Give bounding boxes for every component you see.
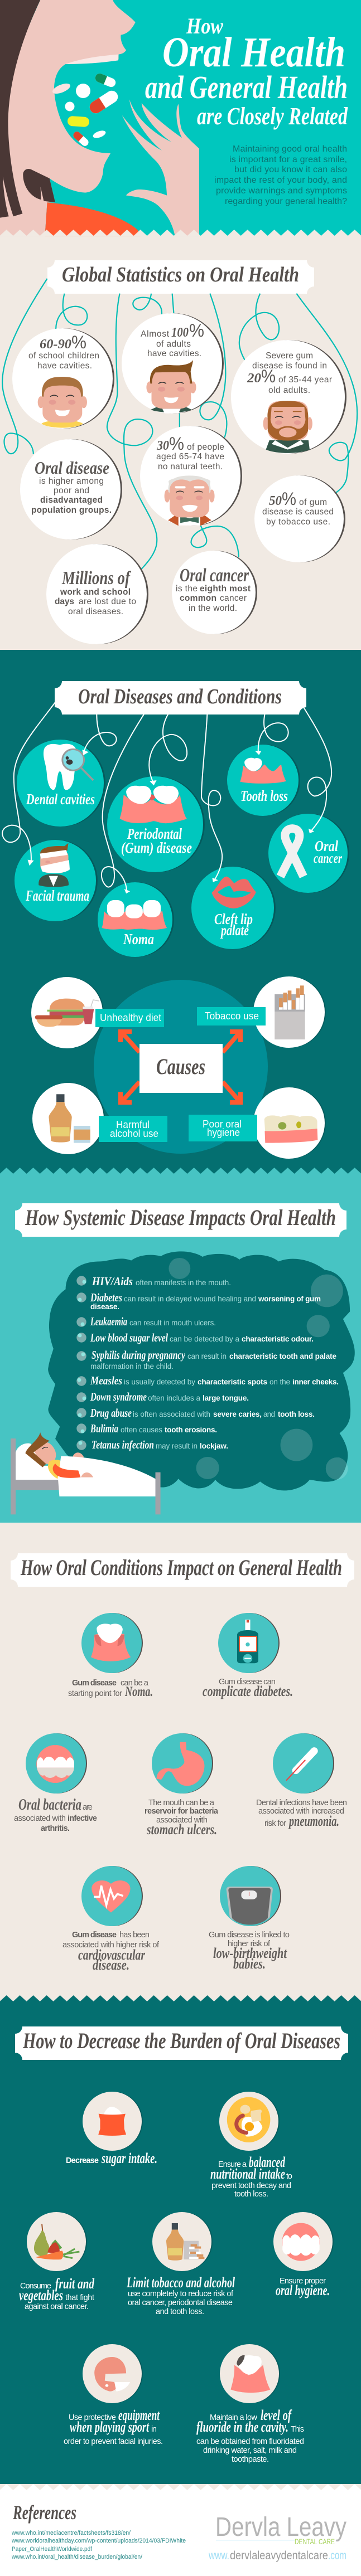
stat bubble: 60-90%: of school children: [28, 351, 99, 361]
stat bubble: almost 100%: Almost: [141, 329, 170, 339]
icon: gum and tooth: [91, 1624, 131, 1661]
stat bubble: 60-90%: 60-90: [40, 337, 71, 352]
banner: oral diseases and conditions: Oral Diseases and Conditions: [78, 685, 282, 708]
zigzag divider: [0, 1168, 361, 1174]
references: Paper_OralHealthWorldwide.pdf: [12, 2546, 93, 2553]
intro paragraph: but did you know it can also: [234, 165, 347, 174]
list: systemic diseases: lockjaw.: [200, 1442, 228, 1450]
impact text: cardiovascular: Gum disease: [72, 1931, 117, 1940]
disease labels: Cleft lip: [214, 911, 253, 927]
cause label: poor oral hygiene: Poor oral: [203, 1119, 242, 1130]
prevention text: nutrition: tooth loss.: [234, 2190, 268, 2199]
discs: prevention icons: [27, 2092, 334, 2403]
list: systemic diseases: characteristic spots: [198, 1378, 267, 1386]
references: www.who.int/mediacentre/factsheets/fs318/en/: [11, 2530, 131, 2536]
list: systemic diseases: may result in: [156, 1442, 198, 1450]
stat bubble: oral disease: [20, 439, 122, 539]
impact text: cardiovascular: [62, 1931, 160, 1973]
impact text: low birthweight: babies.: [233, 1956, 266, 1972]
disease labels: Periodontal: [127, 825, 182, 842]
impact text: arthritis: associated with: [14, 1814, 66, 1823]
causes box: [139, 1044, 223, 1093]
stat bubble: 30% no natural teeth: aged 65-74 have: [156, 452, 224, 461]
prevention text: protective equipment: equipment: [118, 2407, 160, 2423]
list: systemic diseases: often includes a: [148, 1394, 200, 1402]
disease labels: Oral: [315, 838, 338, 854]
list: systemic diseases: Down syndrome: [90, 1390, 147, 1403]
icon: adult man face: [146, 360, 196, 414]
cause label: tobacco use: [197, 1007, 266, 1025]
icons: prevention illustrations row three: [94, 2355, 270, 2393]
icon: older man face: [165, 475, 215, 526]
stat bubble: severe gum disease 20%: Severe gum: [266, 351, 313, 361]
cause label: unhealthy diet: Unhealthy diet: [100, 1012, 161, 1023]
list: systemic diseases: Bulimia: [90, 1422, 118, 1435]
stat bubble: oral cancer: cancer: [220, 594, 247, 603]
icon: heart pulse: [92, 1880, 131, 1913]
impact text: low birthweight: higher risk of: [228, 1940, 271, 1948]
icon: sports helmet: [94, 2357, 130, 2392]
cause label: unhealthy diet: [95, 1009, 164, 1027]
disease labels: Tooth loss: [240, 788, 288, 804]
stat bubble: millions of days: days: [55, 597, 74, 606]
cause label: poor oral hygiene: hygiene: [207, 1127, 240, 1138]
list: systemic diseases: Tetanus infection: [92, 1438, 154, 1451]
stat bubble: 50% tobacco: disease is caused: [262, 507, 334, 517]
banner: global statistics: Global Statistics on Oral Health: [62, 263, 299, 286]
list: systemic diseases: Low blood sugar level: [90, 1331, 168, 1344]
impact text: stomach ulcers: reservoir for bacteria: [145, 1807, 219, 1816]
impact text: diabetes: complicate diabetes.: [203, 1683, 293, 1699]
bullet markers: [76, 1276, 86, 1450]
stat bubble: 50% tobacco: [254, 475, 345, 562]
stat bubble: severe gum disease 20%: disease is found in: [252, 361, 327, 371]
prevention text: fruit and vegetables: that fight: [65, 2293, 94, 2302]
icons: heart and scale: [92, 1880, 273, 1924]
references: www.worldoralhealthday.com/wp-content/uploads/2014/03/FDIWhite: [11, 2538, 186, 2544]
impact text: pneumonia: Dental infections have been: [256, 1799, 347, 1807]
prevention text: fluoride: [196, 2407, 304, 2464]
impact text: noma: Gum disease: [72, 1679, 117, 1688]
thought cloud: [48, 1251, 355, 1490]
icons: teeth, stomach, thermometer: [36, 1742, 314, 1786]
prevention text: sugar: sugar intake.: [101, 2150, 157, 2166]
list: systemic diseases: Leukaemia: [90, 1315, 127, 1328]
logo: dervla leavy dental care: DENTAL CARE: [295, 2537, 335, 2546]
stat bubble: oral cancer: in the world.: [189, 604, 237, 613]
disease labels: (Gum) disease: [121, 839, 192, 856]
stat bubble: 50% tobacco: of gum: [299, 498, 327, 507]
icon: noma gums: [102, 900, 167, 930]
stat bubble: 30% no natural teeth: [140, 426, 242, 526]
list: systemic diseases: is often associated with: [133, 1410, 210, 1418]
causes diagram: [31, 976, 326, 1159]
prevention text: fluoride: fluoride in the cavity.: [196, 2419, 288, 2435]
icon: plaque teeth: [264, 1115, 317, 1143]
prevention text: sugar: [66, 2150, 157, 2166]
impact text: cardiovascular: has been: [119, 1931, 150, 1940]
prevention text: fluoride: drinking water, salt, milk and: [203, 2446, 297, 2455]
zigzag divider: [0, 2484, 361, 2490]
stat bubble: almost 100%: [122, 313, 224, 414]
list: systemic diseases: worsening of gum: [258, 1295, 321, 1303]
icon: teeth with plaque: [36, 1745, 74, 1783]
list: systemic diseases: tooth loss.: [278, 1410, 315, 1418]
zigzag divider: [0, 1995, 361, 2001]
prevention text: protective equipment: when playing sport: [70, 2419, 150, 2435]
list: systemic diseases: often manifests in the mouth.: [136, 1279, 231, 1287]
intro paragraph: [214, 144, 347, 206]
list: systemic diseases: HIV/Aids: [92, 1275, 133, 1288]
intro paragraph: regarding your general health?: [225, 197, 347, 206]
stat bubble: oral disease: poor and: [54, 486, 89, 495]
logo: dervla leavy dental care: dervlaleavydentalcare: [230, 2549, 328, 2562]
icons: conditions illustrations: [38, 744, 304, 930]
stat bubble: 30% no natural teeth: %: [169, 434, 184, 454]
prevention text: nutrition: Ensure a: [218, 2160, 247, 2169]
impact text: pneumonia: associated with increased: [258, 1807, 344, 1816]
prevention text: fluoride: can be obtained from fluoridated: [196, 2437, 304, 2446]
intro paragraph: provide warnings and symptoms: [216, 186, 347, 196]
intro paragraph: is important for a great smile,: [229, 155, 347, 164]
stat bubble: millions of days: are lost due to: [79, 597, 136, 606]
icon: bottle and cigarettes: [166, 2223, 204, 2261]
cause label: harmful alcohol use: [99, 1116, 167, 1142]
logo: dervla leavy dental care: [208, 2512, 346, 2562]
impact text: cardiovascular: associated with higher risk of: [62, 1941, 160, 1950]
disease labels: Dental cavities: [26, 791, 95, 808]
list: systemic diseases: can result in delayed wound healing and: [124, 1295, 256, 1303]
impact text: stomach ulcers: The mouth can be a: [148, 1799, 215, 1807]
stat bubble: 60-90%: have cavities.: [37, 361, 92, 371]
icon: tooth with fluoride cavity: [230, 2355, 270, 2393]
prevention text: fruit and vegetables: Consume: [20, 2282, 51, 2291]
impact text: pneumonia: risk for: [264, 1819, 286, 1828]
impact text: arthritis: arthritis.: [41, 1824, 70, 1833]
icons: causes illustrations: [35, 985, 317, 1143]
prevention text: nutrition: to: [286, 2172, 292, 2181]
list: systemic diseases: and: [263, 1410, 275, 1418]
cause label: harmful alcohol use: Harmful: [116, 1119, 150, 1130]
icon: clean teeth: [282, 2223, 320, 2261]
cause discs: [31, 976, 326, 1159]
list: systemic diseases: characteristic tooth and palate: [229, 1352, 336, 1360]
zigzag divider: [0, 230, 361, 236]
list: systemic diseases: can result in: [187, 1352, 227, 1360]
list: systemic diseases: disease.: [90, 1302, 119, 1311]
stat bubble: oral cancer: is the: [176, 584, 198, 594]
impact text: arthritis: Oral bacteria: [18, 1796, 81, 1814]
icon: cancer ribbon: [281, 829, 304, 877]
icon: sugar bag: [98, 2107, 126, 2136]
stat bubble: oral cancer: eighth most: [200, 584, 251, 594]
disease labels: Facial trauma: [25, 887, 89, 904]
impact text: cardiovascular: cardiovascular: [78, 1947, 146, 1963]
impact text: cardiovascular: disease.: [93, 1957, 129, 1973]
prevention text: hygiene: oral hygiene.: [276, 2282, 330, 2298]
impact text: stomach ulcers: [145, 1799, 219, 1838]
list: systemic diseases: is usually detected by: [124, 1378, 195, 1386]
zigzag divider: [0, 650, 361, 656]
logo: dervla leavy dental care: .com: [328, 2549, 346, 2562]
impact text: diabetes: [203, 1678, 293, 1699]
prevention text: fruit and vegetables: against oral cancer.: [25, 2302, 89, 2311]
prevention text: fluoride: toothpaste.: [232, 2455, 269, 2464]
stat bubble: 60-90%: %: [71, 332, 86, 352]
stat bubble: millions of days: oral diseases.: [68, 607, 123, 616]
stat bubble: oral disease: disadvantaged: [40, 495, 103, 505]
icon: bandaged face: [38, 843, 70, 887]
prevention text: tobacco and alcohol: use completely to reduce risk of: [128, 2290, 234, 2298]
impact text: low birthweight: [209, 1931, 290, 1972]
stat bubble: almost 100%: have cavities.: [147, 349, 201, 358]
icon: breakfast plate: [227, 2097, 270, 2142]
list: systemic diseases: inner cheeks.: [292, 1378, 339, 1386]
banner: global statistics: [47, 260, 314, 294]
stat bubble: severe gum disease 20%: %: [261, 366, 276, 386]
banner: oral diseases and conditions: [55, 681, 306, 715]
icon: thermometer: [287, 1751, 314, 1780]
prevention text: nutrition: prevent tooth decay and: [211, 2181, 291, 2190]
impact text: noma: can be a: [121, 1679, 149, 1688]
stat bubble: 30% no natural teeth: 30: [156, 439, 169, 453]
icon: child face: [38, 377, 87, 427]
impact text: stomach ulcers: associated with: [156, 1816, 208, 1825]
list: systemic diseases: characteristic odour.: [242, 1335, 314, 1343]
list: systemic diseases: Syphilis during pregnancy: [92, 1348, 185, 1362]
list: systemic diseases: Diabetes: [90, 1291, 122, 1304]
stat bubble: oral disease: is higher among: [39, 477, 104, 486]
stat bubble: 30% no natural teeth: of people: [187, 443, 224, 452]
causes box: Causes: [156, 1054, 205, 1079]
references: References: [12, 2501, 76, 2524]
list: systemic diseases: on the: [269, 1378, 290, 1386]
prevention text: fruit and vegetables: vegetables: [19, 2287, 63, 2303]
prevention text: nutrition: balanced: [249, 2154, 286, 2170]
list: systemic diseases: often causes: [121, 1426, 162, 1434]
list: systemic diseases: can be detected by a: [170, 1335, 239, 1343]
intro paragraph: Maintaining good oral health: [233, 144, 347, 154]
arrows: orange four directions: [121, 1032, 240, 1102]
discs: impact icons: [26, 1613, 334, 1926]
impact text: diabetes: Gum disease can: [219, 1678, 276, 1686]
prevention text: tobacco and alcohol: oral cancer, periodontal disease: [128, 2298, 233, 2307]
list: systemic diseases: large tongue.: [203, 1394, 249, 1402]
stat bubble: millions of days: Millions of: [61, 568, 132, 589]
prevention text: protective equipment: order to prevent facial injuries.: [64, 2437, 163, 2446]
list: systemic diseases: [90, 1275, 339, 1451]
list: systemic diseases: Drug abuse: [90, 1406, 132, 1420]
stat bubble: oral disease: population groups.: [31, 506, 112, 515]
references: www.who.int/oral_health/disease_burden/global/en/: [11, 2554, 143, 2560]
stat bubble: 50% tobacco: by tobacco use.: [266, 517, 330, 527]
disease labels: cancer: [314, 851, 342, 866]
prevention text: tobacco and alcohol: Limit tobacco and alcohol: [126, 2274, 235, 2291]
icons: pills: [51, 72, 120, 148]
disease labels: Noma: [123, 931, 154, 947]
icon: stomach: [157, 1742, 204, 1786]
stat bubble: millions of days: [46, 544, 148, 644]
stat bubble: millions of days: work and school: [60, 587, 131, 597]
illustration: patient in bed: [11, 1432, 161, 1514]
prevention text: nutrition: [210, 2154, 292, 2199]
impact text: noma: [68, 1679, 153, 1699]
cause label: harmful alcohol use: alcohol use: [110, 1128, 158, 1139]
impact text: low birthweight: Gum disease is linked to: [209, 1931, 290, 1940]
prevention text: fluoride: level of: [261, 2407, 292, 2423]
prevention text: protective equipment: [64, 2407, 163, 2446]
list: systemic diseases: Measles: [90, 1374, 122, 1387]
stat bubble: oral cancer: [172, 551, 257, 634]
title: [145, 13, 348, 130]
disease labels: palate: [220, 922, 249, 939]
stat bubble: severe gum disease 20%: 20: [247, 371, 261, 386]
impact text: stomach ulcers: stomach ulcers.: [146, 1821, 217, 1838]
illustration: woman taking pills: [0, 0, 199, 236]
cause label: poor oral hygiene: [189, 1115, 257, 1141]
impact text: low birthweight: low-birthweight: [213, 1945, 287, 1961]
stat bubble: severe gum disease 20%: of 35-44 year: [278, 375, 332, 385]
stat bubble: almost 100%: %: [189, 320, 204, 341]
curly connector lines: [2, 279, 357, 571]
icon: periodontal gums: [120, 786, 187, 823]
stat bubble: severe gum disease 20%: [231, 340, 346, 454]
white curly arrows: [2, 702, 331, 893]
intro paragraph: impact the rest of your body, and: [214, 176, 347, 185]
zigzag divider: [0, 1523, 361, 1529]
cause label: tobacco use: Tobacco use: [205, 1010, 259, 1022]
list: systemic diseases: malformation in the child.: [90, 1362, 174, 1370]
stat bubble: almost 100%: of adults: [156, 339, 191, 349]
stat bubble: almost 100%: 100: [171, 325, 189, 340]
stat bubble: 60-90%: [12, 328, 114, 429]
icons: prevention illustrations row one and two: [34, 2097, 320, 2261]
prevention text: protective equipment: in: [151, 2425, 157, 2434]
list: systemic diseases: severe caries,: [213, 1410, 262, 1418]
icon: cigarette pack: [275, 985, 305, 1039]
stat bubble: oral cancer: common: [180, 594, 216, 603]
icons: gum and glucose meter: [91, 1620, 258, 1663]
prevention text: nutrition: nutritional intake: [210, 2166, 285, 2182]
title: How: [186, 13, 223, 38]
impact text: pneumonia: pneumonia.: [288, 1813, 339, 1829]
references: [11, 2501, 186, 2560]
icon: tooth with magnifier: [44, 744, 93, 790]
prevention text: hygiene: [276, 2277, 330, 2298]
icon: bottle and glass: [49, 1094, 90, 1143]
prevention text: hygiene: Ensure proper: [280, 2277, 326, 2286]
list: systemic diseases: can result in mouth ulcers.: [129, 1319, 216, 1327]
prevention text: fluoride: Maintain a low: [210, 2413, 258, 2422]
stat bubble: 30% no natural teeth: no natural teeth.: [158, 462, 223, 472]
icon: tooth loss: [240, 758, 286, 784]
icon: glucose meter: [237, 1620, 258, 1663]
list: systemic diseases: tooth erosions.: [165, 1426, 217, 1434]
impact text: noma: Noma.: [124, 1684, 153, 1699]
stat bubble: oral cancer: Oral cancer: [180, 565, 249, 586]
logo: dervla leavy dental care: www.: [208, 2549, 229, 2562]
prevention text: protective equipment: Use protective: [69, 2413, 116, 2422]
prevention text: sugar: Decrease: [66, 2156, 99, 2165]
prevention text: fruit and vegetables: fruit and: [55, 2276, 95, 2292]
impact text: arthritis: [14, 1796, 97, 1833]
discs: oral diseases and conditions: [15, 740, 349, 957]
disease labels: [25, 788, 342, 947]
icon: burger and hot dog: [35, 999, 99, 1027]
prevention text: tobacco and alcohol: [126, 2274, 235, 2316]
stat bubble: 50% tobacco: %: [282, 489, 296, 509]
impact text: arthritis: are: [83, 1803, 93, 1812]
prevention text: tobacco and alcohol: and tooth loss.: [156, 2307, 204, 2316]
prevention text: fluoride: This: [291, 2425, 304, 2434]
prevention text: fruit and vegetables: [19, 2276, 95, 2311]
impact text: noma: starting point for: [68, 1689, 122, 1698]
impact text: pneumonia: [256, 1799, 347, 1829]
impact text: arthritis: infective: [68, 1814, 97, 1823]
icon: bearded man face: [263, 401, 312, 453]
icon: bathroom scale: [227, 1887, 273, 1924]
stat bubble: severe gum disease 20%: old adults.: [268, 386, 310, 395]
icon: cleft lips: [212, 877, 256, 908]
icon: fruit and vegetables: [34, 2224, 79, 2259]
stat bubble: 50% tobacco: 50: [269, 494, 282, 508]
stat bubble: oral disease: Oral disease: [35, 458, 109, 478]
